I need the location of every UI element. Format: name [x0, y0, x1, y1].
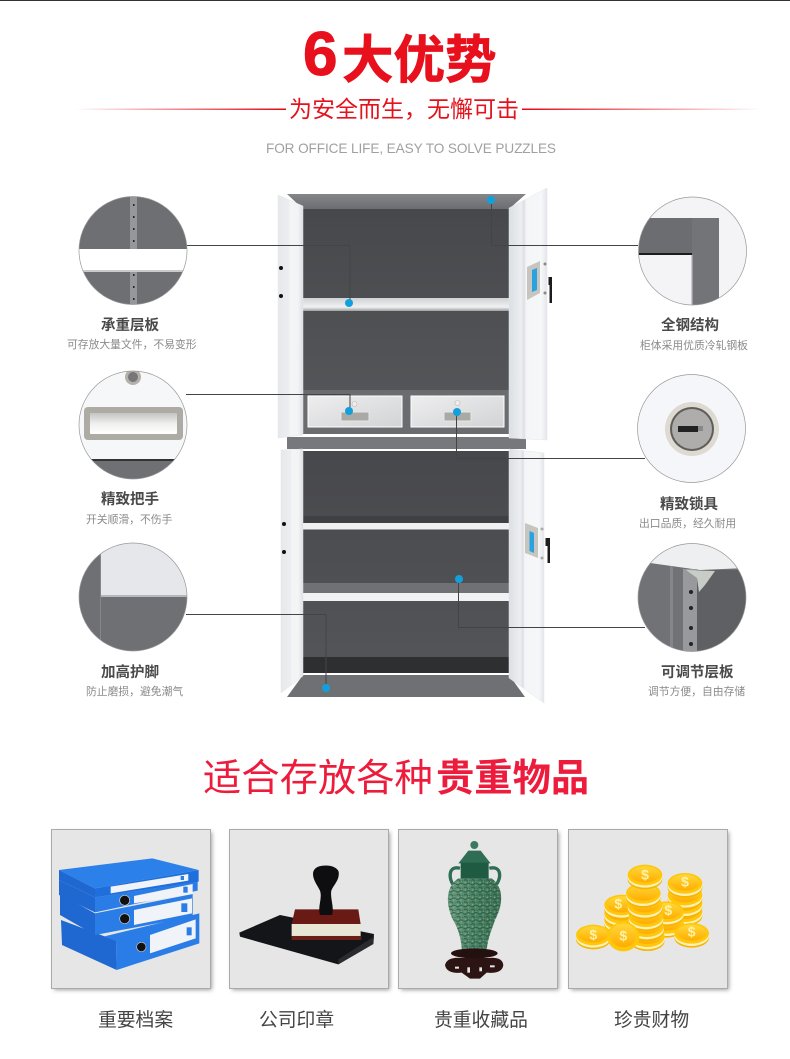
label: load-bearing shelf: 承重层板: [101, 316, 159, 334]
door hinges: [279, 266, 286, 554]
label: adjustable shelf: 调节方便，自由存储: [648, 684, 745, 698]
circle: load-bearing shelf: [79, 196, 187, 306]
caption: valuables: 珍贵财物: [614, 1009, 689, 1030]
upper body: [287, 194, 526, 434]
label: raised foot: [86, 663, 183, 698]
label: lock: [639, 495, 736, 530]
icon: jade vase: [445, 841, 503, 979]
lower electronic lock: [525, 523, 550, 563]
label: all-steel structure: 全钢结构: [661, 316, 719, 334]
icon: gold coins: $: [641, 866, 649, 882]
label: adjustable shelf: 可调节层板: [661, 663, 734, 681]
title: [303, 20, 497, 89]
label: load-bearing shelf: [67, 316, 197, 351]
caption: files: 重要档案: [98, 1009, 173, 1030]
lower right door: [509, 449, 544, 703]
section heading: [203, 757, 589, 800]
caption: stamp: 公司印章: [259, 1009, 334, 1030]
label: adjustable shelf: [648, 663, 745, 698]
label: raised foot: 加高护脚: [101, 663, 159, 681]
cabinet: [278, 188, 552, 703]
label: load-bearing shelf: 可存放大量文件，不易变形: [67, 337, 197, 351]
label: handle: [86, 490, 173, 526]
card: gold coins: [568, 830, 729, 990]
lower left door: [281, 449, 303, 693]
icon: gold coins: $: [614, 895, 622, 911]
subtitle with rules: 为安全而生，无懈可击: [289, 96, 519, 122]
icon: gold coins: [576, 865, 709, 951]
circle: all-steel structure: [638, 197, 748, 306]
section heading: 适合存放各种: [203, 757, 433, 800]
connector: adjustable shelf: [455, 575, 645, 628]
icon: gold coins: $: [619, 928, 627, 944]
middle divider: [287, 437, 526, 449]
connector: lock: [453, 408, 645, 458]
label: lock: 精致锁具: [660, 495, 718, 513]
circle: adjustable shelf: [638, 543, 746, 654]
caption: collectibles: 贵重收藏品: [434, 1009, 528, 1030]
label: raised foot: 防止磨损，避免潮气: [86, 684, 183, 698]
label: lock: 出口品质，经久耐用: [639, 516, 736, 530]
connector: steel: [487, 196, 638, 246]
card: stamp: [230, 830, 390, 990]
title: 大优势: [342, 31, 497, 89]
card: jade vase: [398, 830, 559, 990]
label: handle: 精致把手: [101, 490, 159, 508]
icon: blue file boxes: [59, 858, 199, 970]
connector: shelf: [187, 246, 353, 307]
english tagline: FOR OFFICE LIFE, EASY TO SOLVE PUZZLES: [266, 141, 556, 156]
icon: gold coins: $: [688, 924, 696, 940]
icon: gold coins: $: [589, 926, 597, 942]
upper left door: [278, 195, 303, 438]
circle: handle: [79, 369, 187, 481]
icon: stamp and ink pad: [239, 865, 374, 964]
label: all-steel structure: [640, 316, 748, 352]
icon: gold coins: $: [681, 874, 689, 890]
drawer left: [308, 396, 402, 427]
connector: foot: [186, 614, 330, 692]
icon: gold coins: $: [664, 902, 672, 918]
card: files: [52, 830, 212, 990]
circle: lock: [638, 374, 746, 482]
section heading: 贵重物品: [436, 757, 589, 800]
connector: handle: [186, 394, 353, 415]
title: 6: [303, 20, 337, 89]
upper right door: [509, 188, 547, 440]
label: all-steel structure: 柜体采用优质冷轧钢板: [640, 338, 748, 352]
circle: raised foot: [79, 543, 187, 651]
upper electronic lock: [527, 261, 552, 303]
drawer right: [411, 396, 504, 427]
lower body: [287, 451, 525, 697]
label: handle: 开关顺滑，不伤手: [86, 512, 173, 526]
